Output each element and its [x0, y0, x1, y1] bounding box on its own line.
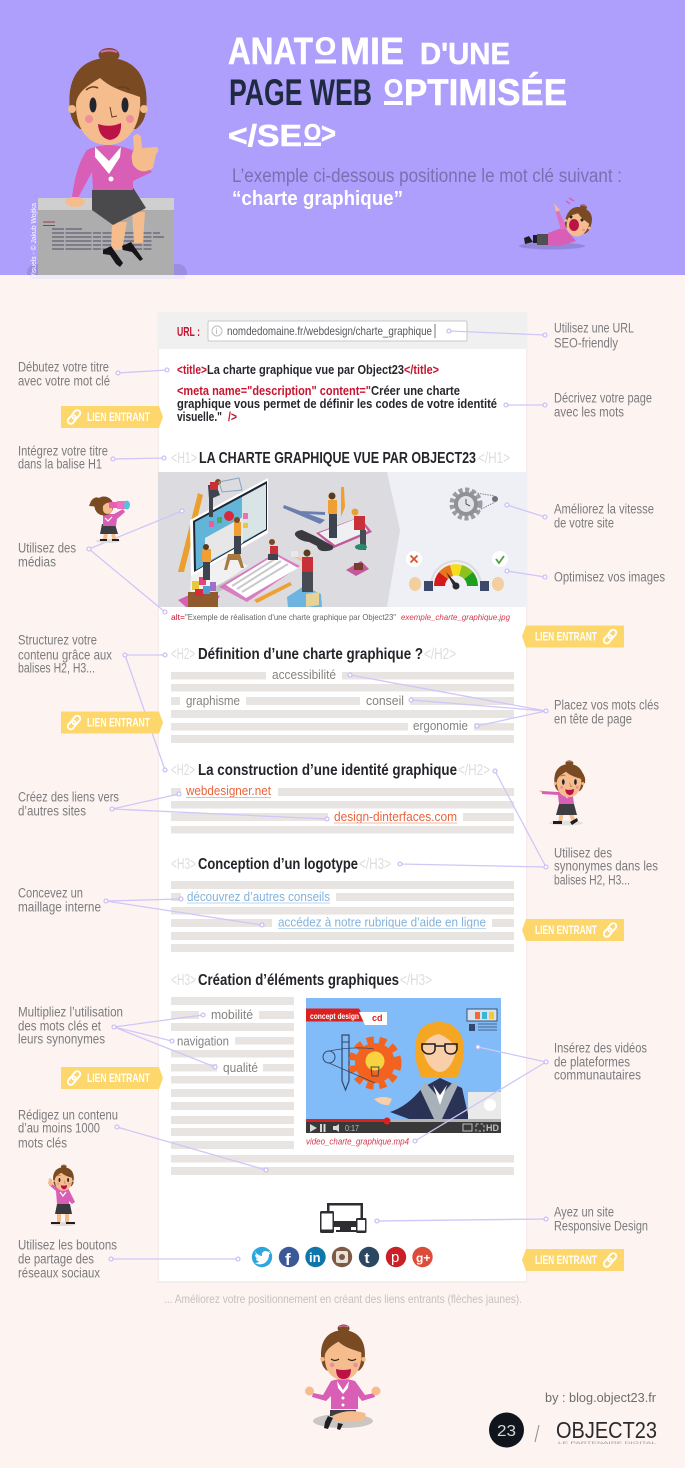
H1 heading: LA CHARTE GRAPHIQUE VUE PAR OBJECT23 [199, 450, 476, 467]
H2 heading: definition: <H2> [171, 646, 195, 663]
connector lines [87, 329, 548, 1261]
social sharing icons [252, 1247, 433, 1269]
header banner [0, 0, 685, 279]
text block with keywords: conseil [366, 693, 404, 708]
video banner: concept design [310, 1012, 359, 1021]
note: site speed: Améliorez la vitesse [554, 502, 654, 516]
inbound link tags [61, 406, 624, 1271]
laptop and browser icon [467, 1009, 501, 1119]
H3 heading: logotype: Conception d’un logotype [198, 856, 358, 873]
note: content length: d’au moins 1000 [18, 1120, 100, 1136]
note: keywords and synonyms: leurs synonymes [18, 1032, 105, 1046]
text block with external links [171, 783, 514, 834]
title [228, 31, 567, 153]
tag: inbound link left 3 [61, 1067, 163, 1089]
presenter [374, 1022, 469, 1119]
lying character [519, 198, 597, 250]
alt text caption: exemple_charte_graphique.jpg [401, 612, 510, 622]
note: content length: mots clés [18, 1136, 67, 1150]
player controls: 0:17 [345, 1124, 359, 1133]
tag: inbound link left 2: LIEN ENTRANT [87, 718, 150, 730]
title: > [321, 118, 336, 150]
tag: inbound link right 1 [522, 626, 624, 648]
H3 heading: graphic elements: <H3> [171, 972, 196, 989]
note: structure: contenu grâce aux [18, 648, 112, 662]
URL bar [158, 312, 527, 349]
note: external links: d’autres sites [18, 804, 86, 818]
note: title start: Débutez votre titre [18, 360, 109, 374]
tag: inbound link left 3: LIEN ENTRANT [87, 1073, 150, 1085]
H2 heading: definition: Définition d’une charte graphique ? [198, 646, 423, 663]
text block with external links: design-dinterfaces.com [334, 809, 457, 824]
icon: facebook: f [285, 1250, 291, 1269]
icon: google plus [412, 1247, 433, 1267]
note: description: avec les mots [554, 404, 624, 420]
note: synonyms in headings: synonymes dans les [554, 858, 658, 874]
title: </SE [228, 118, 302, 153]
video filename: video_charte_graphique.mp4 [306, 1136, 409, 1148]
text block with internal links: découvrez d’autres conseils [187, 889, 330, 904]
logo badge [489, 1412, 524, 1448]
note: synonyms in headings: Utilisez des [554, 846, 612, 860]
subtitle [232, 166, 622, 210]
note: media: Utilisez des [18, 540, 76, 556]
note: responsive design: Responsive Design [554, 1218, 648, 1234]
text block with synonyms: navigation [177, 1034, 229, 1048]
note: social sharing: de partage des [18, 1252, 94, 1266]
icon: linkedin: in [309, 1250, 321, 1265]
logo badge: 23 [497, 1423, 516, 1440]
H3 heading: logotype: <H3> [171, 856, 196, 873]
note: H1 tag: dans la balise H1 [18, 456, 102, 472]
tag: inbound link left 2 [61, 712, 163, 734]
note: H1 tag: Intégrez votre titre [18, 444, 108, 458]
note: optimise images: Optimisez vos images [554, 570, 665, 584]
H3 heading: graphic elements: Création d’éléments graphiques [198, 972, 399, 989]
H1 heading: <H1> [171, 450, 197, 467]
note: top keywords: Placez vos mots clés [554, 698, 659, 712]
speed gear icon [452, 490, 498, 518]
note: site speed: de votre site [554, 516, 614, 530]
video player [306, 998, 501, 1133]
title: O [384, 75, 403, 103]
footnote: ... Améliorez votre positionnement en créant des liens entrants (flèches jaunes). [164, 1292, 522, 1306]
player controls [306, 1118, 501, 1133]
title: PAGE WEB [229, 72, 372, 113]
H2 heading: construction: La construction d’une identité graphique [198, 762, 457, 779]
URL bar: i [216, 327, 218, 336]
note: SEO friendly URL: SEO-friendly [554, 336, 618, 350]
image optimisation gauge [406, 551, 508, 591]
note: structure: balises H2, H3... [18, 660, 95, 676]
H2 heading: construction: <H2> [171, 762, 195, 779]
icon: twitter [252, 1247, 272, 1267]
title: O [304, 119, 321, 145]
subtitle: L’exemple ci-dessous positionne le mot clé suivant : [232, 166, 622, 187]
tag: inbound link right 2: LIEN ENTRANT [535, 925, 597, 937]
credit and logo [489, 1390, 657, 1448]
H3 heading: logotype: </H3> [359, 856, 391, 873]
meta title: <title> [177, 363, 207, 377]
icon: pinterest [386, 1247, 406, 1267]
icon: tumblr [359, 1247, 379, 1267]
logo wordmark: OBJECT23 [556, 1417, 657, 1443]
note: videos: Insérez des vidéos [554, 1040, 647, 1056]
meta description: /> [228, 410, 237, 424]
meta description [177, 384, 497, 424]
text block with keywords [171, 667, 514, 743]
tag: inbound link right 3: LIEN ENTRANT [535, 1255, 597, 1267]
title: D'UNE [420, 36, 510, 71]
note: structure: Structurez votre [18, 632, 97, 648]
right annotations [554, 320, 665, 1234]
icon: instagram [332, 1247, 352, 1267]
tag: inbound link right 3 [522, 1249, 624, 1271]
tag: inbound link left 1: LIEN ENTRANT [87, 412, 150, 424]
icon: facebook [279, 1247, 299, 1269]
note: videos: de plateformes [554, 1054, 630, 1070]
icon: tumblr: t [364, 1250, 370, 1267]
note: title start: avec votre mot clé [18, 374, 110, 388]
text block with keywords: graphisme [186, 693, 240, 708]
tag: inbound link right 2 [522, 919, 624, 941]
note: content length: Rédigez un contenu [18, 1108, 118, 1122]
note: internal linking: Concevez un [18, 886, 83, 900]
logo wordmark: LE PARTENAIRE DIGITAL [558, 1441, 656, 1445]
icon: linkedin [305, 1247, 326, 1267]
video banner [306, 1008, 387, 1025]
note: media: médias [18, 554, 56, 570]
player controls: HD [486, 1123, 499, 1133]
note: keywords and synonyms: des mots clés et [18, 1018, 101, 1034]
note: keywords and synonyms: Multipliez l’utilisation [18, 1004, 123, 1020]
text block with internal links: accédez à notre rubrique d’aide en ligne [278, 914, 486, 930]
alt text caption [171, 612, 510, 622]
alt text caption: "Exemple de réalisation d'une charte graphique par Object23" [185, 612, 396, 622]
note: top keywords: en tête de page [554, 712, 632, 726]
tag: inbound link right 1: LIEN ENTRANT [535, 632, 597, 644]
title: ANAT [228, 31, 313, 73]
note: social sharing: réseaux sociaux [18, 1266, 100, 1280]
note: SEO friendly URL: Utilisez une URL [554, 320, 634, 336]
icon: responsive devices [320, 1203, 366, 1233]
title: MIE [340, 31, 404, 73]
H2 heading: construction: </H2> [458, 762, 490, 779]
video banner: cd [372, 1013, 383, 1023]
panel: web page mock-up [158, 312, 528, 1283]
icon: pinterest: p [391, 1249, 399, 1266]
note: external links: Créez des liens vers [18, 790, 119, 804]
text block with synonyms [171, 997, 514, 1175]
text block with external links: webdesigner.net [185, 783, 271, 798]
tag: inbound link left 1 [61, 406, 163, 428]
character with binoculars [89, 496, 130, 543]
note: description: Décrivez votre page [554, 390, 652, 406]
subtitle: “charte graphique” [232, 188, 403, 210]
note: videos: communautaires [554, 1068, 641, 1082]
character sitting on code block: Visuels - © Jakub Wojtka [29, 202, 38, 278]
meta description: visuelle." [177, 410, 222, 424]
text block with keywords: accessibilité [272, 667, 336, 682]
URL bar: nomdedomaine.fr/webdesign/charte_graphique [227, 324, 432, 338]
character pointing [539, 760, 585, 826]
character waving [48, 1165, 76, 1226]
URL bar: URL : [177, 324, 200, 339]
meta title: </title> [404, 363, 439, 377]
meta description: <meta name="description" content=" [177, 384, 371, 398]
icon: google plus: g+ [416, 1251, 430, 1265]
pencil and gear with light bulb [323, 1035, 398, 1090]
meta description: graphique vous permet de définir les codes de votre identité [177, 397, 497, 411]
text block with synonyms: mobilité [211, 1007, 253, 1022]
note: internal linking: maillage interne [18, 900, 101, 914]
left annotations [18, 360, 123, 1280]
note: responsive design: Ayez un site [554, 1204, 614, 1220]
note: social sharing: Utilisez les boutons [18, 1238, 117, 1252]
hero image: design team illustration [158, 472, 527, 607]
meta description: Créer une charte [371, 384, 460, 398]
title: O [315, 33, 336, 61]
text block with internal links [171, 881, 514, 952]
H1 heading: </H1> [478, 450, 510, 467]
alt text caption: alt= [171, 612, 185, 622]
meta title: La charte graphique vue par Object23 [207, 363, 404, 377]
H3 heading: graphic elements: </H3> [400, 972, 432, 989]
text block with keywords: ergonomie [413, 718, 468, 733]
credit and logo: by : blog.object23.fr [545, 1390, 657, 1405]
character sitting on code block [27, 48, 187, 279]
meditating character [305, 1325, 380, 1430]
title: PTIMISÉE [404, 72, 567, 113]
text block with synonyms: qualité [223, 1060, 258, 1075]
note: synonyms in headings: balises H2, H3... [554, 872, 630, 888]
H2 heading: definition: </H2> [424, 646, 456, 663]
